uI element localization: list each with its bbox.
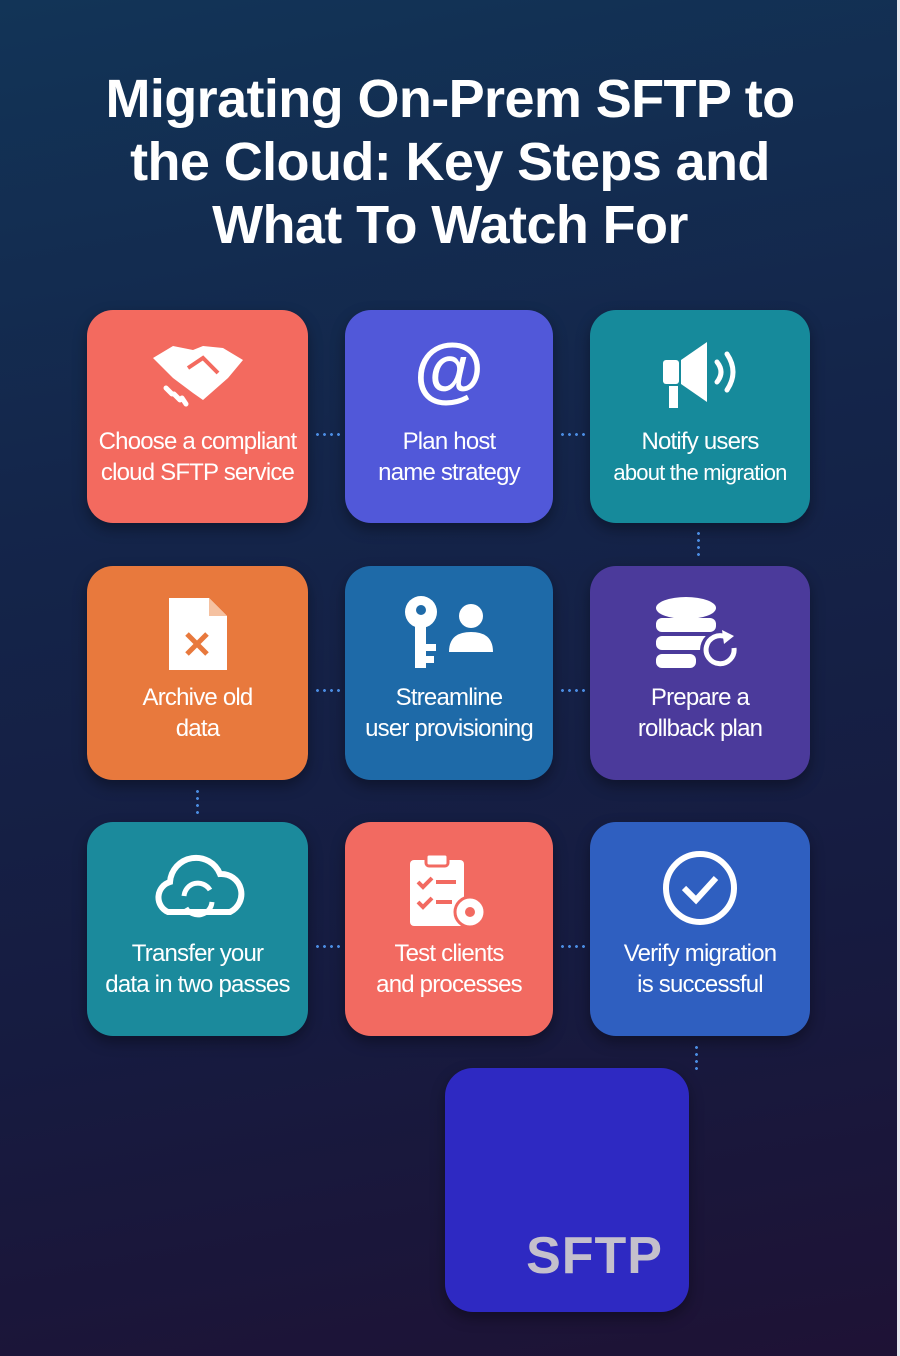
SFTP box <box>445 1068 689 1312</box>
card: archive old data: Archive old <box>143 684 252 711</box>
card: choose compliant service: Choose a compliant <box>99 428 296 455</box>
card: plan host name: name strategy <box>378 459 520 486</box>
card: rollback plan <box>590 566 810 780</box>
icon: key and user <box>405 596 493 668</box>
icon: file with x <box>169 598 227 670</box>
connectors <box>196 433 700 1310</box>
card: notify users <box>590 310 810 523</box>
card: archive old data <box>87 566 308 780</box>
card: plan host name <box>345 310 553 523</box>
title: the Cloud: Key Steps and <box>130 132 770 192</box>
card: transfer data: data in two passes <box>105 971 290 998</box>
card: verify migration <box>590 822 810 1036</box>
card: streamline provisioning: user provisioning <box>365 715 533 742</box>
icon: cloud sync <box>155 854 244 918</box>
icon: database with refresh <box>656 597 737 668</box>
icon: clipboard gear <box>410 856 484 926</box>
card: notify users: about the migration <box>613 460 787 485</box>
card: choose compliant service: cloud SFTP service <box>101 459 294 486</box>
card: test clients: Test clients <box>394 940 504 967</box>
card: rollback plan: Prepare a <box>651 684 749 711</box>
card: plan host name: Plan host <box>403 428 495 455</box>
card: verify migration: is successful <box>637 971 763 998</box>
SFTP box: SFTP <box>526 1227 663 1285</box>
card: archive old data: data <box>176 715 219 742</box>
card: rollback plan: rollback plan <box>638 715 762 742</box>
card: verify migration: Verify migration <box>624 940 776 967</box>
card: transfer data: Transfer your <box>132 940 263 967</box>
title: Migrating On-Prem SFTP to <box>105 69 795 129</box>
icon: check circle <box>663 851 737 925</box>
card: notify users: Notify users <box>641 428 759 455</box>
card: streamline provisioning <box>345 566 553 780</box>
card: streamline provisioning: Streamline <box>396 684 502 711</box>
card: choose compliant service <box>87 310 308 523</box>
icon: at sign: @ <box>414 330 484 410</box>
icon: megaphone <box>663 342 736 408</box>
title <box>105 69 795 255</box>
icon: handshake <box>153 346 243 406</box>
title: What To Watch For <box>212 195 688 255</box>
card: test clients: and processes <box>376 971 522 998</box>
card: transfer data <box>87 822 308 1036</box>
card: test clients <box>345 822 553 1036</box>
